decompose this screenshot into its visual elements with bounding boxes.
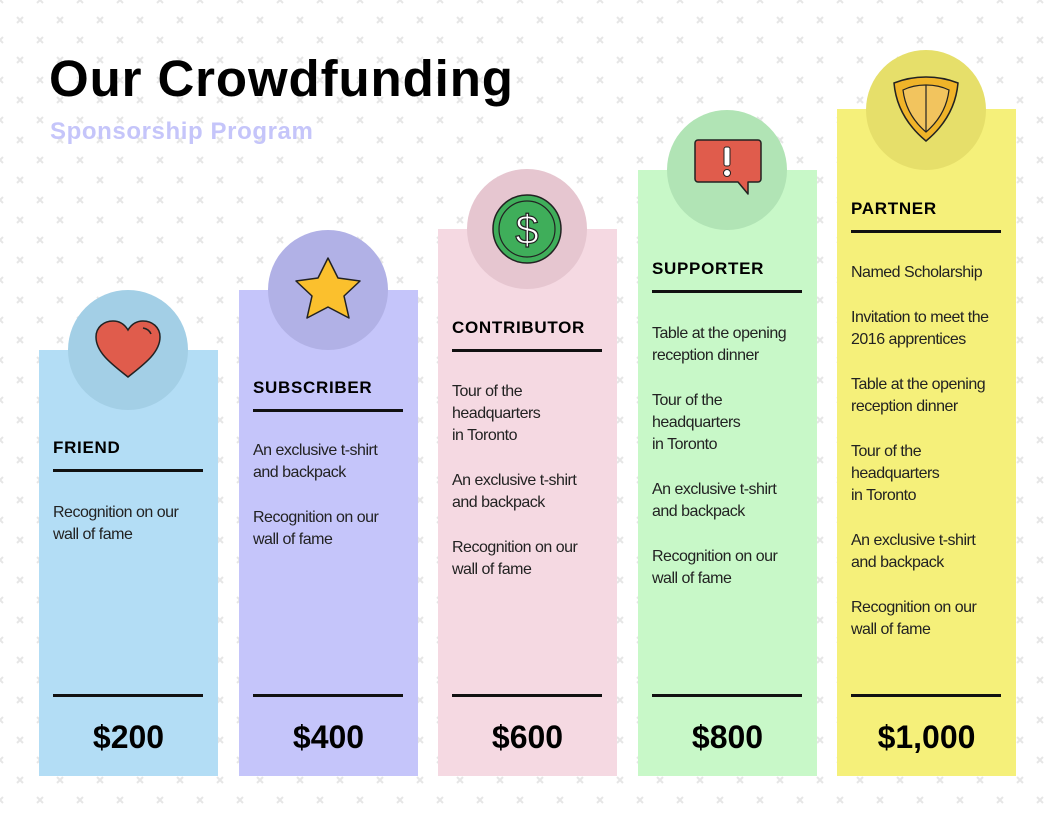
text: contributor benefits: Tour of the — [452, 383, 522, 400]
text: subscriber benefits: and backpack — [253, 464, 346, 481]
heading: partner: PARTNER — [851, 199, 937, 218]
price: $400: $400 — [293, 719, 364, 755]
heading: friend: FRIEND — [53, 438, 120, 457]
text: contributor benefits: in Toronto — [452, 427, 517, 444]
price: $600: $600 — [492, 719, 563, 755]
panel: friend — [39, 350, 218, 776]
text: contributor benefits: headquarters — [452, 405, 540, 422]
price: $800: $800 — [692, 719, 763, 755]
icon: star — [268, 230, 388, 350]
text: partner benefits: Invitation to meet the — [851, 309, 989, 326]
text: subscriber benefits: Recognition on our — [253, 509, 378, 526]
panel: subscriber — [239, 290, 418, 776]
text: contributor benefits: An exclusive t-shirt — [452, 472, 576, 489]
icon: dollar coin — [467, 169, 587, 289]
text: subscriber benefits: wall of fame — [253, 531, 332, 548]
text: supporter benefits: Table at the opening — [652, 325, 786, 342]
icon: shield — [866, 50, 986, 170]
panel: contributor — [438, 229, 617, 776]
icon: dollar coin: $ — [515, 206, 539, 253]
text: contributor benefits — [452, 383, 578, 578]
text: contributor benefits: Recognition on our — [452, 539, 577, 556]
text: friend benefits — [53, 504, 179, 543]
text: contributor benefits: and backpack — [452, 494, 545, 511]
text: partner benefits: Recognition on our — [851, 599, 976, 616]
heading: supporter: SUPPORTER — [652, 259, 764, 278]
text: partner benefits: Named Scholarship — [851, 264, 982, 281]
text: supporter benefits: wall of fame — [652, 570, 731, 587]
text: partner benefits — [851, 264, 989, 638]
text: supporter benefits: in Toronto — [652, 436, 717, 453]
text: supporter benefits: and backpack — [652, 503, 745, 520]
icon: heart — [68, 290, 188, 410]
title: Our Crowdfunding — [49, 50, 514, 107]
price: $1,000: $1,000 — [878, 719, 975, 755]
text: partner benefits: reception dinner — [851, 398, 958, 415]
text: partner benefits: wall of fame — [851, 621, 930, 638]
text: supporter benefits: Tour of the — [652, 392, 722, 409]
panel: partner — [837, 109, 1016, 776]
panel: supporter — [638, 170, 817, 776]
text: contributor benefits: wall of fame — [452, 561, 531, 578]
text: partner benefits: 2016 apprentices — [851, 331, 966, 348]
text: supporter benefits: headquarters — [652, 414, 740, 431]
text: partner benefits: headquarters — [851, 465, 939, 482]
text: subscriber benefits — [253, 442, 379, 548]
text: supporter benefits — [652, 325, 786, 587]
heading: subscriber: SUBSCRIBER — [253, 378, 372, 397]
text: supporter benefits: An exclusive t-shirt — [652, 481, 776, 498]
icon: alert speech bubble — [667, 110, 787, 230]
text: partner benefits: Table at the opening — [851, 376, 985, 393]
text: friend benefits: wall of fame — [53, 526, 132, 543]
heading: contributor: CONTRIBUTOR — [452, 318, 585, 337]
text: supporter benefits: Recognition on our — [652, 548, 777, 565]
text: partner benefits: and backpack — [851, 554, 944, 571]
subtitle: Sponsorship Program — [50, 118, 313, 145]
text: supporter benefits: reception dinner — [652, 347, 759, 364]
text: partner benefits: An exclusive t-shirt — [851, 532, 975, 549]
text: subscriber benefits: An exclusive t-shirt — [253, 442, 377, 459]
text: partner benefits: in Toronto — [851, 487, 916, 504]
text: friend benefits: Recognition on our — [53, 504, 178, 521]
price: $200: $200 — [93, 719, 164, 755]
text: partner benefits: Tour of the — [851, 443, 921, 460]
